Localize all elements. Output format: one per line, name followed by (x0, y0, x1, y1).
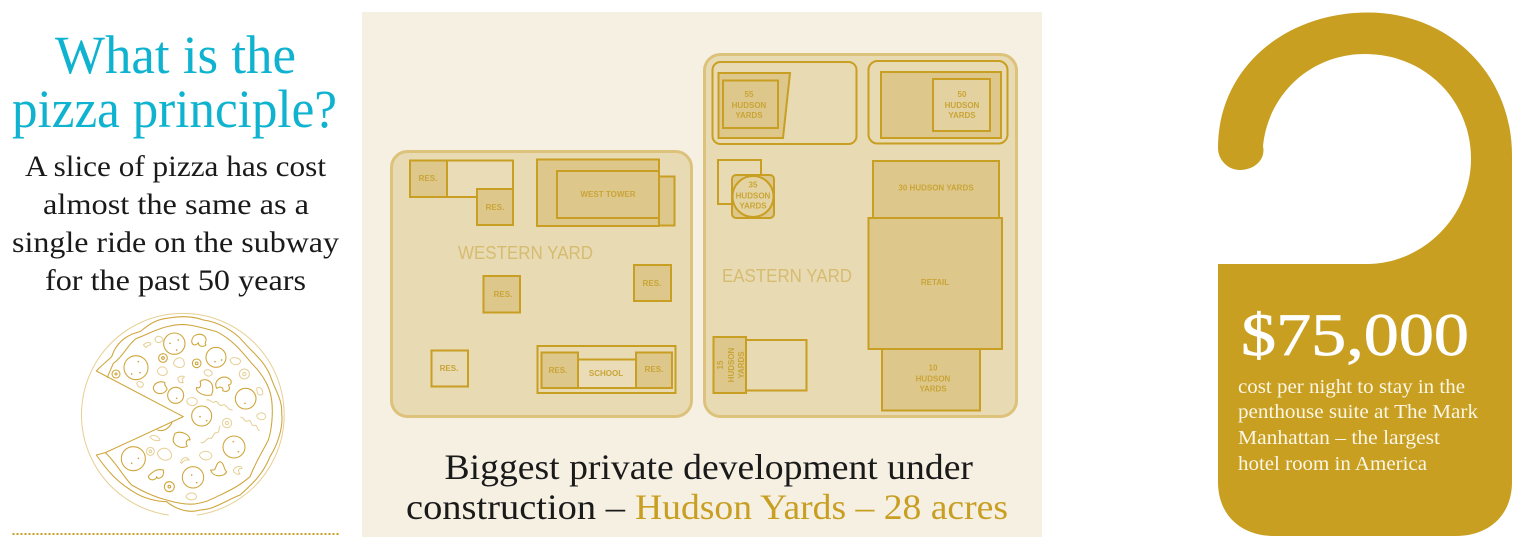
building: 50 Hudson Yards (868, 61, 1008, 144)
building: 55 Hudson Yards: YARDS (735, 111, 763, 120)
building: residential, southwest (432, 350, 468, 386)
building: Retail: RETAIL (921, 278, 949, 287)
caption: construction – (406, 487, 626, 527)
text block: penthouse suite: hotel room in America (1238, 453, 1427, 475)
building: 15 Hudson Yards: YARDS (737, 351, 746, 379)
building: 50 Hudson Yards: 50 (958, 90, 967, 99)
figure: $75,000: $75,000 (1241, 302, 1469, 368)
building: residential, east (634, 265, 671, 301)
title: pizza principle? (12, 79, 337, 139)
text block: pizza principle explanation: A slice of pizza has cost (25, 150, 327, 183)
building: residential, centre (484, 276, 520, 312)
building: 30 Hudson Yards (873, 161, 999, 218)
building: West Tower (537, 160, 674, 226)
building: 10 Hudson Yards: 10 (929, 364, 938, 372)
icon: pizza with missing slice (81, 313, 284, 515)
building: 15 Hudson Yards: HUDSON (727, 347, 736, 382)
door hanger (1218, 12, 1512, 536)
text block: pizza principle explanation (12, 150, 339, 297)
building: northwest residential block: RES. (419, 174, 437, 183)
building: northwest residential block: RES. (486, 203, 504, 212)
building: 55 Hudson Yards (712, 62, 856, 144)
building: residential, southwest: RES. (440, 364, 458, 373)
label: Eastern Yard: EASTERN YARD (722, 266, 852, 286)
building: Retail (868, 218, 1002, 349)
building: school and residential block: RES. (549, 366, 567, 375)
text block: pizza principle explanation: for the past 50 years (45, 264, 306, 297)
building: 50 Hudson Yards: YARDS (948, 111, 976, 120)
building: 55 Hudson Yards: HUDSON (732, 101, 767, 110)
text block: penthouse suite: cost per night to stay in the (1238, 376, 1465, 398)
building: residential, east: RES. (643, 279, 661, 288)
caption: Biggest private development under (444, 447, 973, 487)
caption: Hudson Yards – 28 acres (635, 487, 1008, 527)
building: 35 Hudson Yards: 35 (749, 180, 758, 190)
caption (406, 447, 1008, 527)
panel: Eastern Yard map (704, 54, 1016, 416)
building: school and residential block: SCHOOL (589, 369, 623, 378)
building: school and residential block: RES. (645, 365, 663, 374)
title (12, 25, 337, 139)
text block: penthouse suite: penthouse suite at The Mark (1238, 401, 1478, 423)
building: school and residential block (538, 346, 676, 393)
dotted divider (12, 533, 339, 535)
building: northwest residential block (410, 160, 513, 225)
building: 35 Hudson Yards: YARDS (739, 202, 767, 210)
building: 30 Hudson Yards: 30 HUDSON YARDS (898, 184, 974, 192)
building: 15 Hudson Yards (714, 337, 806, 393)
label: Western Yard: WESTERN YARD (458, 243, 593, 263)
panel: Western Yard map (392, 152, 692, 416)
title: What is the (55, 25, 296, 85)
building: West Tower: WEST TOWER (581, 190, 636, 199)
building: 15 Hudson Yards: 15 (716, 360, 725, 369)
building: 55 Hudson Yards: 55 (745, 90, 754, 99)
building: 50 Hudson Yards: HUDSON (945, 101, 980, 110)
building: 10 Hudson Yards (882, 349, 980, 410)
panel: Hudson Yards (362, 12, 1042, 537)
building: 10 Hudson Yards: HUDSON (916, 374, 951, 384)
building: 35 Hudson Yards (718, 160, 774, 218)
text block: pizza principle explanation: almost the same as a (43, 188, 309, 221)
building: 35 Hudson Yards: HUDSON (736, 192, 771, 200)
text block: penthouse suite (1238, 376, 1478, 475)
door hanger shape (1218, 12, 1512, 536)
building: 10 Hudson Yards: YARDS (919, 384, 947, 394)
building: residential, centre: RES. (494, 290, 512, 299)
text block: pizza principle explanation: single ride on the subway (12, 226, 339, 259)
text block: penthouse suite: Manhattan – the largest (1238, 427, 1440, 449)
